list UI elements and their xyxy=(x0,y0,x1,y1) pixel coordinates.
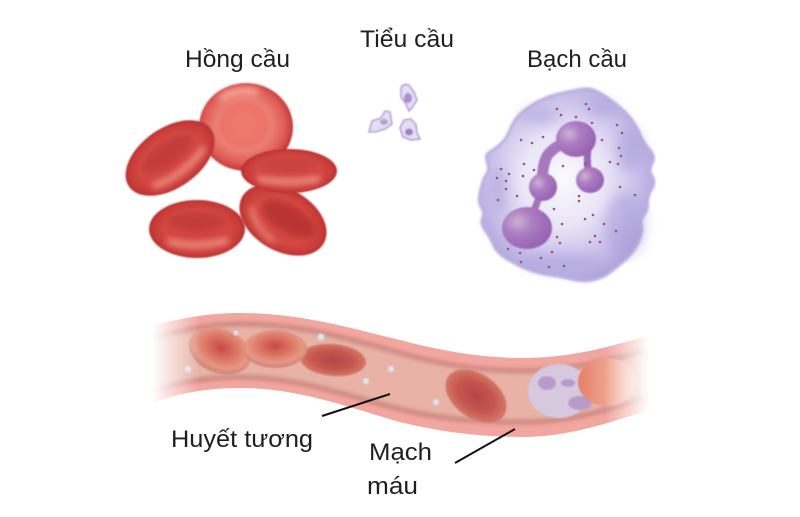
red cell in vessel: centre xyxy=(243,330,307,368)
left fade xyxy=(140,300,200,420)
red cell in vessel: left xyxy=(182,319,258,383)
label: Huyết tương: Huyết tương xyxy=(171,426,313,453)
illustration: red blood cells xyxy=(112,83,339,270)
illustration: white blood cell xyxy=(479,89,654,281)
red cell in vessel: tilted xyxy=(436,358,516,434)
heading: Tiểu cầu: Tiểu cầu xyxy=(360,26,454,53)
illustration: blood vessel xyxy=(140,300,660,445)
small platelets in plasma xyxy=(185,330,439,405)
red cell: top round xyxy=(199,83,293,171)
illustration: platelets xyxy=(369,84,420,140)
cytoplasm shading xyxy=(491,100,645,270)
white cell in vessel xyxy=(528,364,592,418)
heading: Bạch cầu: Bạch cầu xyxy=(527,46,627,73)
granules xyxy=(496,103,636,268)
right fade xyxy=(605,320,660,445)
platelet: right xyxy=(400,119,420,140)
label: máu: máu xyxy=(367,473,418,500)
red cell: bottom left xyxy=(149,200,245,258)
leader line: vessel xyxy=(455,429,515,463)
platelet: left xyxy=(369,111,392,132)
platelet: top xyxy=(401,84,417,111)
red cell: middle right xyxy=(241,149,337,193)
red cell: left tilted xyxy=(112,105,228,211)
label: Mạch: Mạch xyxy=(369,439,432,466)
white cell body xyxy=(479,89,654,281)
leader line: plasma xyxy=(322,394,390,416)
lumen edge shading xyxy=(150,324,650,422)
red cell in vessel: far right dark xyxy=(299,341,367,379)
red cell: bottom right xyxy=(227,170,339,270)
nucleus xyxy=(502,121,604,249)
vessel wall xyxy=(150,313,650,437)
heading: Hồng cầu: Hồng cầu xyxy=(185,46,290,73)
vessel lumen xyxy=(150,323,650,423)
red cell in vessel: right xyxy=(578,358,636,406)
